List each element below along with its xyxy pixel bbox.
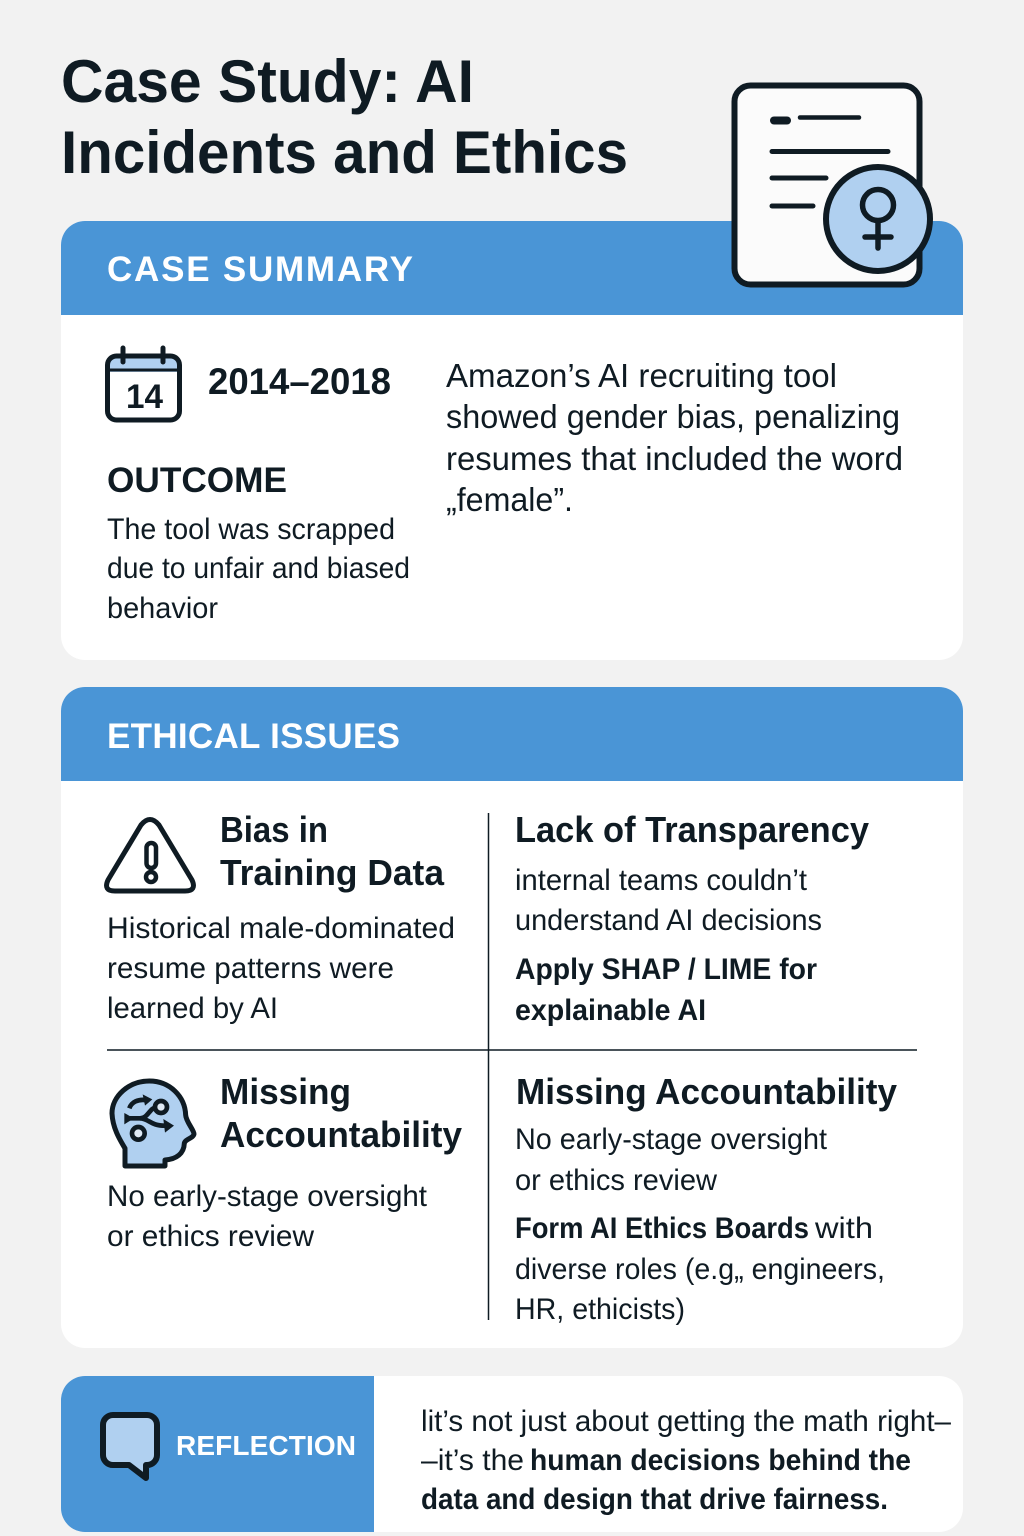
issue: missing accountability, right: HR, ethicists)	[515, 1293, 685, 1326]
issue: missing accountability, right: diverse roles (e.g„ engineers,	[515, 1253, 885, 1286]
panel: case summary	[61, 221, 963, 660]
reflection text: data and design that drive fairness.	[421, 1483, 888, 1516]
icon: speech bubble	[103, 1415, 157, 1478]
icon: calendar	[107, 348, 180, 420]
case description: Amazon’s AI recruiting tool	[446, 357, 837, 394]
panel: reflection	[61, 1376, 963, 1532]
reflection text: lit’s not just about getting the math right–	[421, 1405, 951, 1438]
issue: lack of transparency: internal teams couldn’t	[515, 864, 808, 897]
case description: „female”.	[446, 481, 573, 518]
issue: lack of transparency: Apply SHAP / LIME for	[515, 953, 817, 986]
issue: missing accountability, left: or ethics review	[107, 1220, 314, 1253]
issue: bias in training data: Historical male-dominated	[107, 912, 455, 945]
issue: lack of transparency: explainable AI	[515, 994, 706, 1027]
issue: missing accountability, right: No early-stage oversight	[515, 1123, 828, 1156]
panel: ethical issues	[61, 687, 963, 1348]
icon: head with arrows	[112, 1081, 194, 1166]
date range: 2014–2018	[208, 361, 391, 402]
outcome text: behavior	[107, 592, 218, 625]
issue: missing accountability, right: with	[814, 1212, 873, 1245]
issue: lack of transparency	[515, 809, 869, 1027]
outcome text: The tool was scrapped	[107, 513, 395, 546]
title: Case Study: AI	[61, 48, 474, 115]
reflection text	[421, 1405, 951, 1516]
reflection text: –it’s the	[421, 1444, 524, 1477]
issue: missing accountability, left: Missing	[220, 1071, 351, 1112]
heading: reflection: REFLECTION	[176, 1430, 356, 1461]
issue: missing accountability, left: No early-stage oversight	[107, 1180, 428, 1213]
reflection text: human decisions behind the	[530, 1444, 911, 1477]
issue: missing accountability, right: Missing Accountability	[516, 1071, 897, 1112]
issue: bias in training data: Bias in	[220, 809, 328, 850]
icon: warning triangle	[107, 820, 193, 891]
icon: calendar: 14	[126, 378, 163, 416]
issue: bias in training data: resume patterns were	[107, 952, 394, 985]
outcome text: due to unfair and biased	[107, 552, 410, 585]
case description: showed gender bias, penalizing	[446, 398, 900, 435]
heading: case summary: CASE SUMMARY	[107, 250, 413, 289]
issue: bias in training data: learned by AI	[107, 992, 278, 1025]
issue: lack of transparency: Lack of Transparency	[515, 809, 869, 850]
case description: resumes that included the word	[446, 440, 903, 477]
case description	[446, 357, 903, 518]
title: Incidents and Ethics	[61, 119, 628, 186]
heading: outcome: OUTCOME	[107, 461, 287, 500]
title	[61, 48, 628, 186]
issue: bias in training data	[107, 809, 455, 1025]
issue: lack of transparency: understand AI decisions	[515, 904, 822, 937]
icon: document with female symbol	[734, 86, 930, 284]
issue: missing accountability, right: Form AI Ethics Boards	[515, 1212, 809, 1245]
heading: ethical issues: ETHICAL ISSUES	[107, 717, 400, 756]
issue: missing accountability, left	[107, 1071, 462, 1253]
issue: bias in training data: Training Data	[220, 852, 445, 893]
issue: missing accountability, right	[515, 1071, 897, 1326]
outcome text	[107, 513, 410, 625]
issue: missing accountability, left: Accountability	[220, 1114, 462, 1155]
issue: missing accountability, right: or ethics review	[515, 1164, 717, 1197]
